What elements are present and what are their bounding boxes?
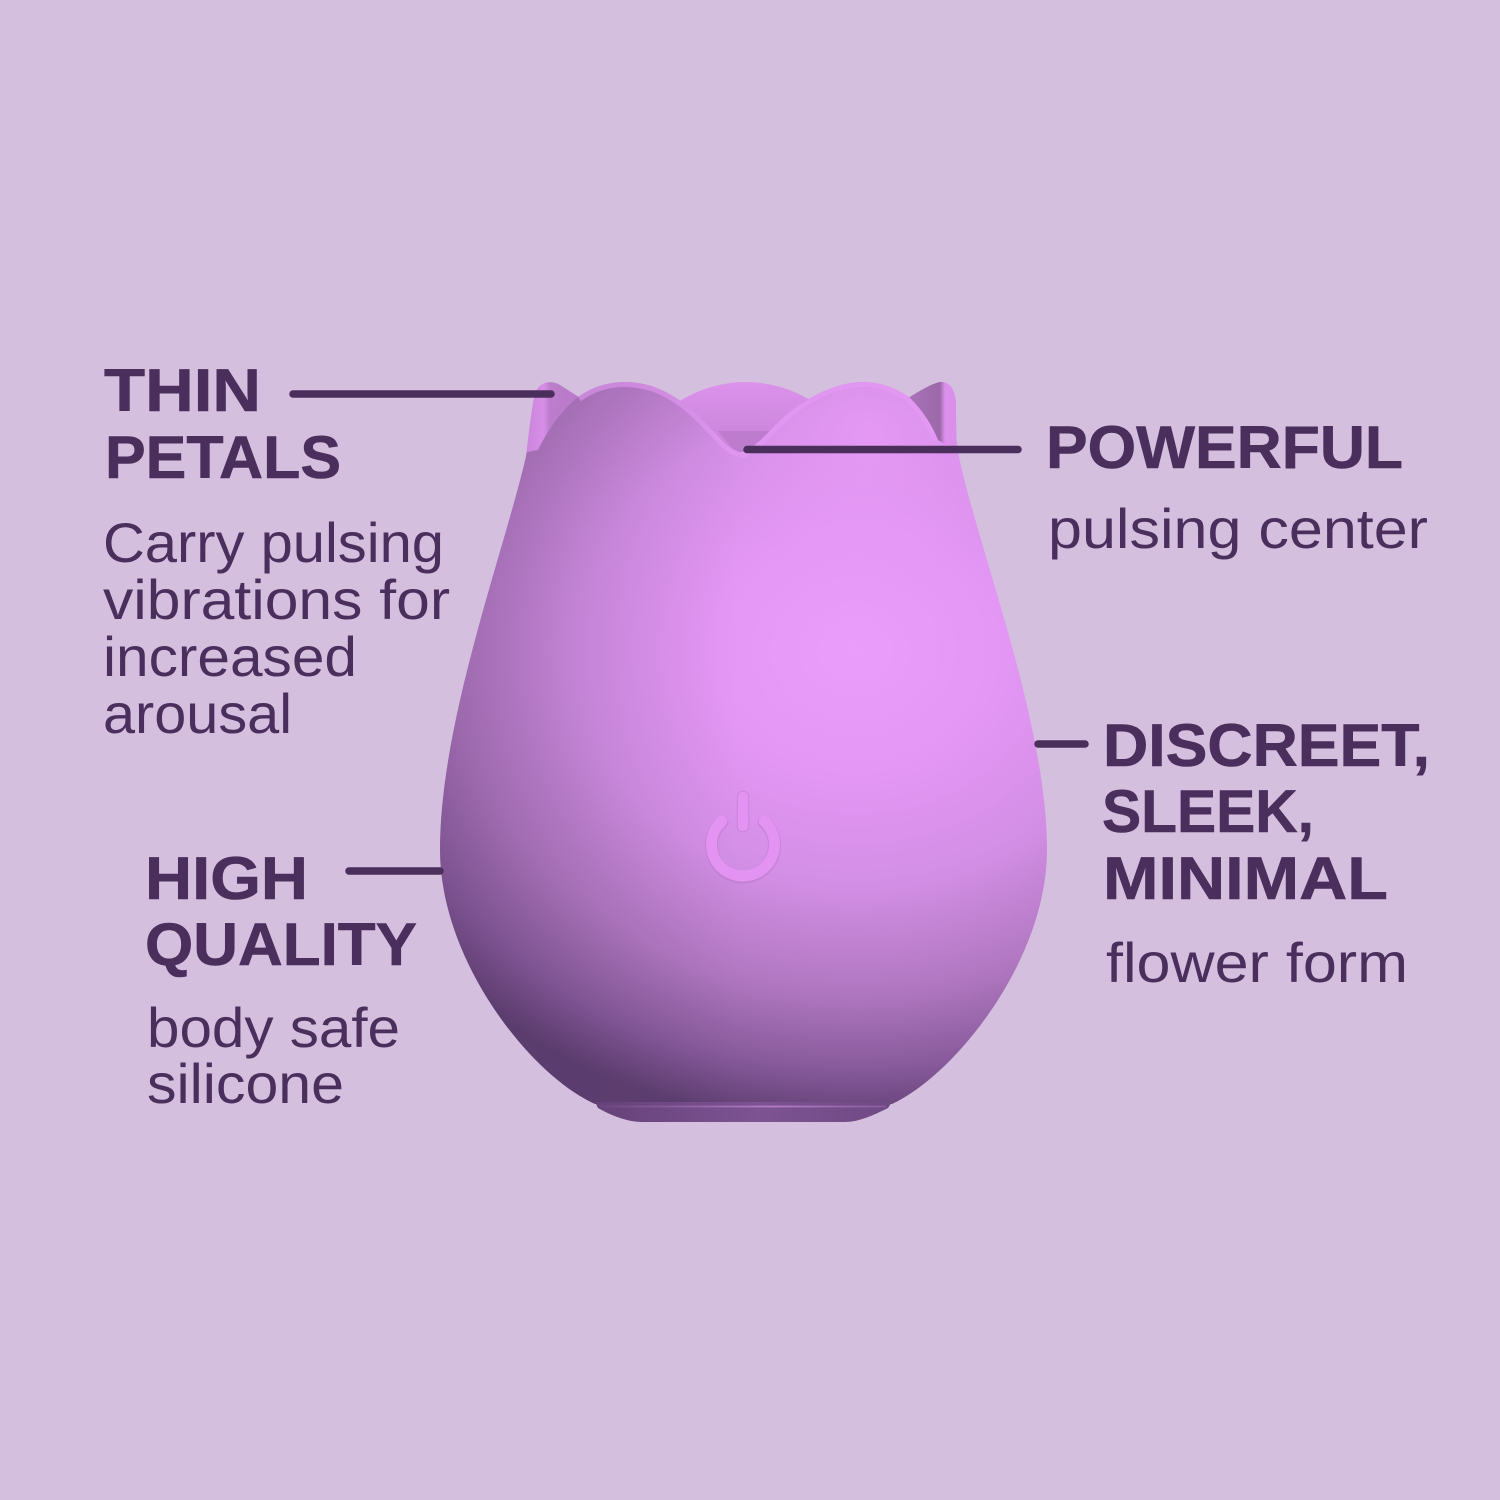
heading: high quality: QUALITY [145,911,417,978]
callout: high quality [145,845,440,1115]
heading: thin petals [104,357,341,491]
base highlight line [600,1106,886,1108]
text: high quality description: silicone [147,1052,344,1115]
leader line: discreet [1038,740,1085,748]
text: flower form: flower form [1106,931,1408,994]
text: powerful description: pulsing center [1048,497,1428,560]
heading: discreet, sleek, minimal: MINIMAL [1103,845,1388,912]
text: thin petals description: arousal [103,682,292,745]
petal rim highlight [578,382,938,453]
heading: thin petals: THIN [104,357,261,424]
callout: thin petals [103,357,551,745]
inner back petal [678,382,810,452]
heading: powerful: POWERFUL [1046,414,1403,481]
heading: discreet, sleek, minimal: SLEEK, [1102,778,1314,845]
product illustration: flower-shaped device [440,382,1047,1122]
icon: power button [712,797,775,877]
text: thin petals description: increased [103,625,357,688]
text: high quality description [147,996,400,1115]
upper right petal glow [790,387,941,466]
callout: discreet, sleek, minimal [1038,712,1430,994]
text: high quality description: body safe [147,996,400,1059]
heading: discreet, sleek, minimal: DISCREET, [1103,712,1430,779]
heading: high quality: HIGH [145,845,308,912]
heading: discreet, sleek, minimal [1102,712,1430,912]
main body silhouette [440,382,1047,1104]
leader line: thin petals [293,390,551,398]
left side shading [440,387,658,978]
pulsing center [718,431,772,452]
callout: powerful [747,414,1428,560]
back right petal [905,382,958,455]
leader line: high quality [349,867,440,875]
back left petal [525,382,582,465]
leader line: powerful [747,446,1018,453]
text: thin petals description: Carry pulsing [103,511,444,574]
base [595,1102,892,1122]
heading: high quality [145,845,417,978]
text: thin petals description [103,511,450,745]
heading: thin petals: PETALS [105,424,341,491]
text: thin petals description: vibrations for [103,568,450,631]
